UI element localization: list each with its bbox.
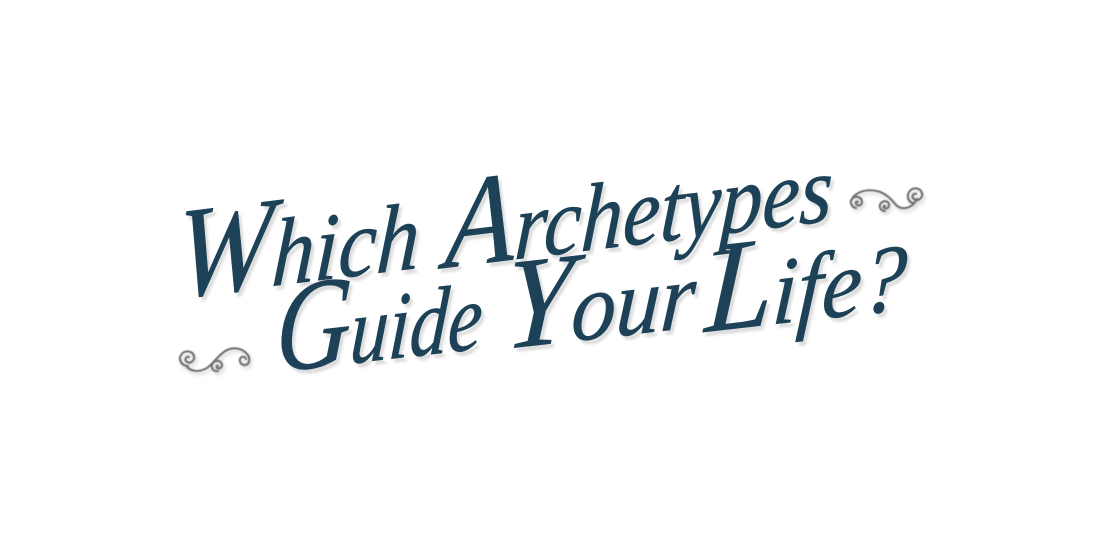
ornament: top right flourish [851,188,922,211]
title line 1: Which [172,153,424,327]
title line 1 [172,105,837,327]
title line 2: Life? [700,194,912,361]
title [172,105,912,401]
ornament: bottom left flourish [180,348,249,371]
title line 1: Archetypes [435,105,837,298]
title line 2: Guide [272,233,488,401]
title line 2: Your [501,212,701,378]
title line 2 [272,194,912,401]
